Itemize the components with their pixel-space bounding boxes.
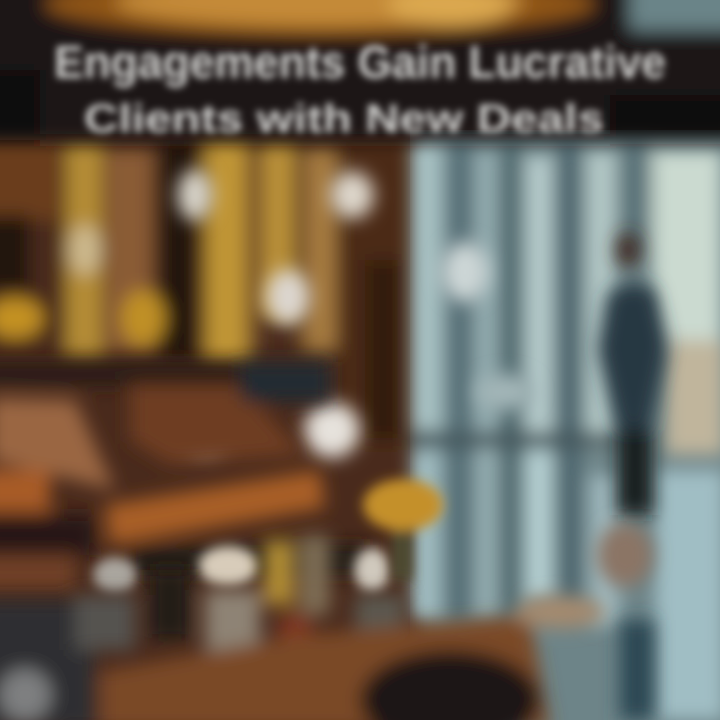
standing person silhouette: [598, 232, 668, 720]
yellow flower bouquet: [363, 479, 443, 580]
lower glows: [93, 546, 390, 593]
lamps: white glows: [177, 169, 535, 458]
tables and furniture: [0, 362, 370, 590]
left panel: warm wooden columns: [0, 130, 420, 720]
title: [54, 36, 666, 141]
title: Engagements Gain Lucrative: [54, 36, 666, 88]
top dark band with ceiling light: [0, 0, 720, 140]
title: Clients with New Deals: [84, 97, 604, 141]
foreground table and glasses: [0, 523, 653, 720]
right panel: window stripes: [410, 135, 720, 720]
